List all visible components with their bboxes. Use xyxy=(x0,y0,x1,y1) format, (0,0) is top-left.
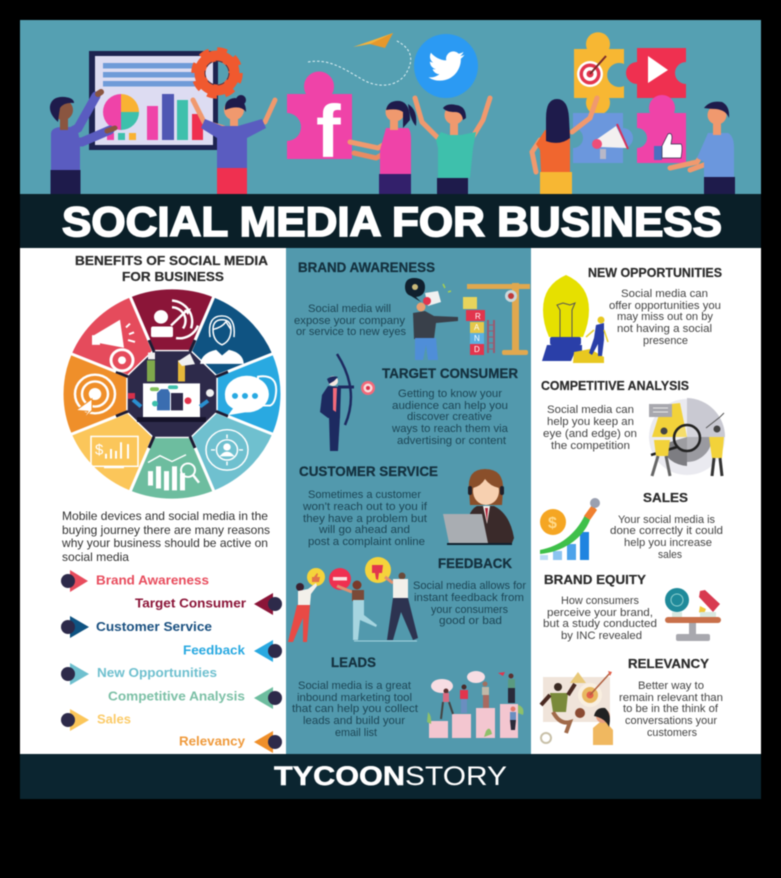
competitive analysis text: eye (and edge) on xyxy=(543,428,637,440)
brand awareness text: expose your company xyxy=(294,315,406,327)
target consumer text: ways to reach them via xyxy=(391,423,509,435)
legend: feedback: Feedback xyxy=(183,642,246,658)
icon: f letter: f xyxy=(316,90,341,173)
brand equity heading: BRAND EQUITY xyxy=(544,572,646,587)
illustration: brand man, blocks and crane: R xyxy=(475,312,481,321)
center laptop with hands xyxy=(128,353,214,422)
competitive analysis heading: COMPETITIVE ANALYSIS xyxy=(541,378,689,393)
new opportunities heading: NEW OPPORTUNITIES xyxy=(588,265,722,280)
illustration: people on rising blocks xyxy=(427,671,523,738)
benefits paragraph xyxy=(61,509,270,564)
icon: megaphone xyxy=(592,124,628,159)
brand awareness text xyxy=(294,303,407,338)
sales text: done correctly it could xyxy=(610,525,723,537)
benefits wheel xyxy=(62,288,282,500)
legend: customer service xyxy=(61,616,212,638)
icon: target and person xyxy=(151,300,198,338)
illustration: sales growth chart xyxy=(540,498,600,560)
illustration: archer and target xyxy=(320,354,375,451)
benefits paragraph: social media xyxy=(62,550,129,564)
leads heading: LEADS xyxy=(331,655,376,670)
icon: target xyxy=(577,56,606,87)
footer brand xyxy=(274,761,507,791)
icon: play xyxy=(648,56,668,83)
presentation board with charts xyxy=(89,51,218,150)
benefits heading xyxy=(75,253,269,284)
customer service text: Sometimes a customer xyxy=(308,489,421,501)
illustration: medal and tag on table xyxy=(665,588,721,641)
illustration: analysts with magnifier xyxy=(649,398,725,476)
relevancy heading: RELEVANCY xyxy=(628,656,709,671)
leads text: leads and build your xyxy=(303,715,405,727)
panel: benefits xyxy=(20,248,286,754)
icon: woman bust xyxy=(201,316,243,363)
competitive analysis text xyxy=(543,404,637,452)
relevancy text: remain relevant than xyxy=(619,692,723,704)
legend: brand awareness: Brand Awareness xyxy=(96,572,209,588)
legend: new opportunities: New Opportunities xyxy=(97,665,217,680)
new opportunities text xyxy=(609,288,721,347)
brand equity text: perceive your brand, xyxy=(547,607,653,619)
illustration: brand man, blocks and crane: D xyxy=(474,345,480,354)
target consumer text: discover creative xyxy=(407,411,492,423)
illustration: support agent with laptop xyxy=(443,469,514,545)
legend: relevancy: Relevancy xyxy=(179,734,246,748)
new opportunities text: Social media can xyxy=(621,288,708,300)
brand equity text: but a study conducted xyxy=(543,618,657,630)
leads text: inbound marketing tool xyxy=(297,692,412,704)
footer bar xyxy=(20,754,761,799)
icon: target with cursor xyxy=(75,375,115,419)
legend: target consumer xyxy=(135,593,282,615)
brand awareness text: or service to new eyes xyxy=(296,326,407,338)
person pointing at board xyxy=(50,92,115,194)
man cheering in teal xyxy=(415,98,490,194)
illustration: sales growth chart: $ xyxy=(548,515,557,532)
new opportunities text: offer opportunities you xyxy=(609,300,721,312)
brand equity text: by INC revealed xyxy=(561,630,642,642)
facebook puzzle piece xyxy=(287,72,352,173)
leads text: Social media is a great xyxy=(298,680,411,692)
target consumer text: Getting to know your xyxy=(398,388,502,400)
brand awareness heading: BRAND AWARENESS xyxy=(298,260,435,275)
feedback text: instant feedback from xyxy=(414,592,524,604)
icon: megaphone and gear xyxy=(92,320,135,371)
customer service text xyxy=(302,489,428,548)
icon: orange gear xyxy=(194,50,240,96)
yellow puzzle with target xyxy=(574,32,624,115)
title bar xyxy=(20,194,761,248)
leads text: email list xyxy=(335,727,377,739)
feedback text: your consumers xyxy=(431,604,508,616)
new opportunities text: may miss out on by xyxy=(617,311,713,323)
customer service text: they have a problem but xyxy=(303,513,427,525)
legend: sales: Sales xyxy=(97,712,131,726)
feedback heading: FEEDBACK xyxy=(438,556,512,571)
icon: dollar monitor: $ xyxy=(95,443,103,459)
new opportunities text: not having a social xyxy=(617,323,712,335)
competitive analysis text: Social media can xyxy=(547,404,634,416)
target consumer text: audience can help you xyxy=(392,400,508,412)
benefits paragraph: why your business should be active on xyxy=(61,536,268,550)
customer service text: will go ahead and xyxy=(318,524,410,536)
customer service heading: CUSTOMER SERVICE xyxy=(299,464,438,479)
feedback text: good or bad xyxy=(439,615,502,627)
blue puzzle with megaphone xyxy=(573,113,633,163)
illustration: feedback people xyxy=(288,557,418,642)
relevancy text: Better way to xyxy=(638,680,704,692)
panel: middle column xyxy=(286,248,531,754)
woman seen from behind in orange xyxy=(532,98,597,194)
paper plane xyxy=(353,33,393,48)
sales heading: SALES xyxy=(643,490,688,505)
brand awareness text: Social media will xyxy=(308,303,391,315)
customer service text: won't reach out to you if xyxy=(302,501,428,513)
footer brand: STORY xyxy=(405,761,507,791)
illustration: team and target xyxy=(541,671,613,745)
illustration: light bulb with climber xyxy=(542,275,608,363)
title: SOCIAL MEDIA FOR BUSINESS xyxy=(62,198,722,245)
illustration: brand man, blocks and crane: A xyxy=(474,323,480,332)
feedback text xyxy=(413,580,526,627)
leads text: that can help you collect xyxy=(292,703,418,715)
legend: target consumer: Target Consumer xyxy=(135,596,246,610)
sales text: help you increase xyxy=(624,537,712,549)
header banner xyxy=(20,20,761,195)
legend: sales xyxy=(61,709,131,731)
leads text xyxy=(292,680,418,739)
pink puzzle with thumbs up xyxy=(637,95,686,163)
icon: dollar monitor xyxy=(91,436,138,468)
legend: feedback xyxy=(183,640,282,662)
brand equity text xyxy=(543,595,657,642)
dotted flight path xyxy=(308,40,411,85)
relevancy text: customers xyxy=(647,727,697,739)
target consumer text xyxy=(391,388,509,447)
competitive analysis text: the competition xyxy=(551,440,630,452)
relevancy text xyxy=(619,680,723,739)
target consumer heading: TARGET CONSUMER xyxy=(382,366,518,381)
man in blue holding puzzle xyxy=(670,102,735,194)
relevancy text: to be in the think of xyxy=(623,703,719,715)
relevancy text: conversations your xyxy=(625,715,717,727)
brand equity text: How consumers xyxy=(561,595,639,607)
benefits heading: FOR BUSINESS xyxy=(122,269,224,284)
illustration: brand man, blocks and crane xyxy=(405,278,530,360)
sales text: sales xyxy=(658,549,682,561)
customer service text: post a complaint online xyxy=(308,536,425,548)
red puzzle with play icon xyxy=(626,48,686,98)
benefits paragraph: buying journey there are many reasons xyxy=(62,523,270,537)
competitive analysis text: help you keep an xyxy=(547,416,634,428)
legend: relevancy xyxy=(179,731,282,753)
sales text: Your social media is xyxy=(618,514,715,526)
woman in pink holding puzzle xyxy=(350,101,416,194)
woman cheering in blue and red xyxy=(193,95,275,194)
icon: twitter circle xyxy=(414,34,478,98)
footer brand: TYCOON xyxy=(274,761,405,791)
benefits paragraph: Mobile devices and social media in the xyxy=(62,509,268,523)
legend: competitive analysis xyxy=(108,687,282,709)
icon: thumbs up xyxy=(654,134,682,160)
benefits heading: BENEFITS OF SOCIAL MEDIA xyxy=(75,253,269,268)
legend: competitive analysis: Competitive Analysis xyxy=(108,688,245,704)
legend: new opportunities xyxy=(61,663,217,685)
icon: speech bubbles xyxy=(225,376,276,415)
legend: customer service: Customer Service xyxy=(96,619,212,634)
icon: person in circle xyxy=(206,430,248,470)
illustration: brand man, blocks and crane: N xyxy=(474,334,480,343)
legend: brand awareness xyxy=(61,570,209,592)
icon: bar chart with magnifier xyxy=(148,455,199,490)
sales text xyxy=(610,514,723,561)
feedback text: Social media allows for xyxy=(413,580,526,592)
new opportunities text: presence xyxy=(643,335,688,347)
panel: right column xyxy=(531,248,761,754)
target consumer text: advertising or content xyxy=(397,435,506,447)
